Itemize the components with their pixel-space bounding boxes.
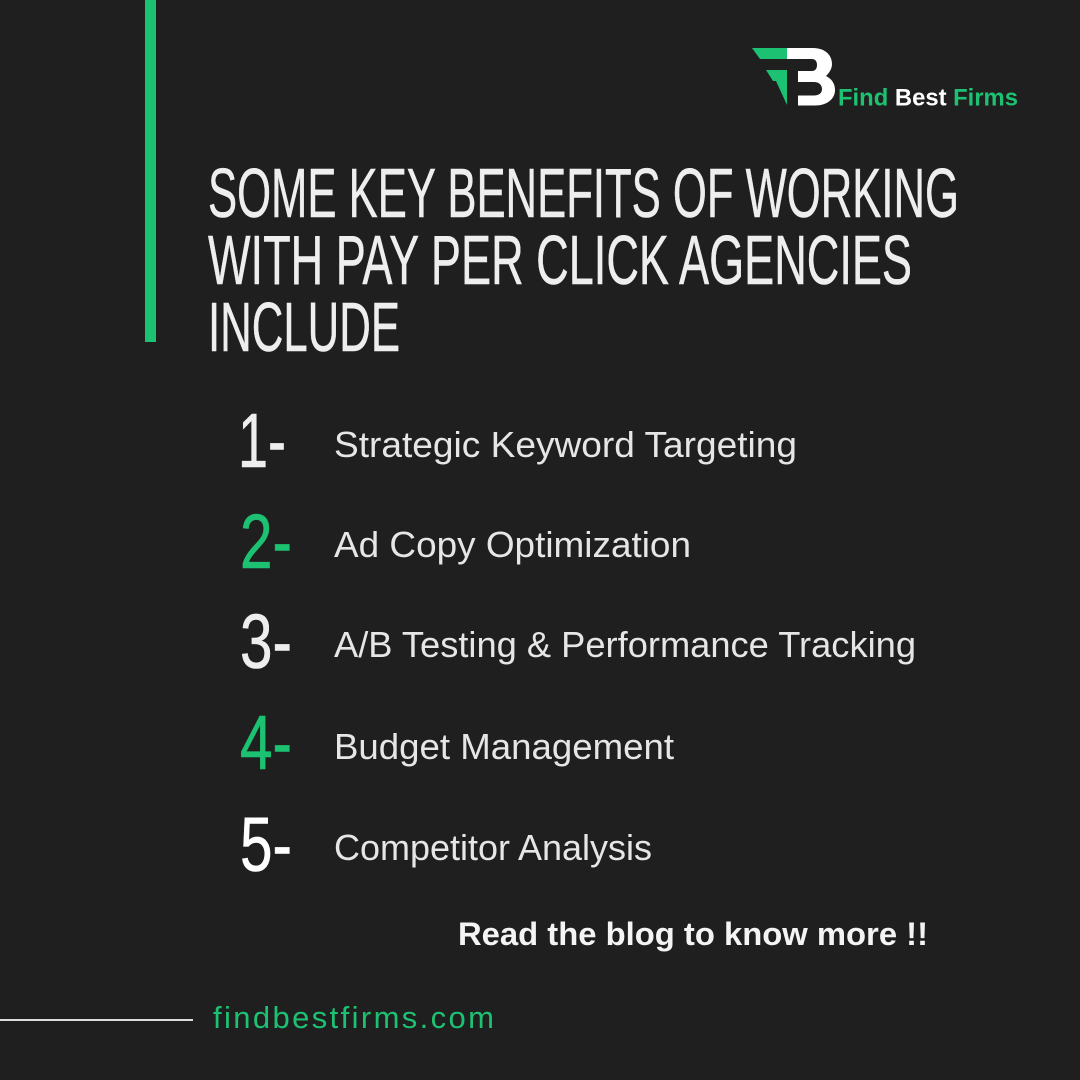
icon: FB monogram — [752, 48, 835, 106]
label 2: Ad Copy Optimization — [334, 524, 691, 565]
list item 3 — [240, 599, 916, 685]
title: INCLUDE — [208, 288, 400, 366]
logo wordmark: Find Best Firms — [838, 84, 1018, 112]
list item 5 — [240, 802, 652, 888]
number 3: 3- — [240, 599, 292, 685]
footer website url: findbestfirms.com — [213, 1000, 494, 1035]
label 1: Strategic Keyword Targeting — [334, 424, 797, 465]
green vertical accent bar — [145, 0, 156, 342]
number 2: 2- — [240, 499, 292, 585]
call to action: Read the blog to know more !! — [458, 916, 928, 952]
footer rule — [0, 1019, 193, 1021]
list item 1 — [238, 398, 797, 484]
number 5: 5- — [240, 802, 292, 888]
list item 2 — [240, 499, 691, 585]
number 4: 4- — [240, 700, 292, 786]
label 3: A/B Testing & Performance Tracking — [334, 624, 916, 665]
label 4: Budget Management — [334, 726, 674, 767]
list item 4 — [240, 700, 674, 786]
number 1: 1- — [238, 398, 286, 484]
title — [208, 154, 959, 366]
label 5: Competitor Analysis — [334, 827, 652, 868]
logo: Find Best Firms — [752, 48, 1018, 112]
